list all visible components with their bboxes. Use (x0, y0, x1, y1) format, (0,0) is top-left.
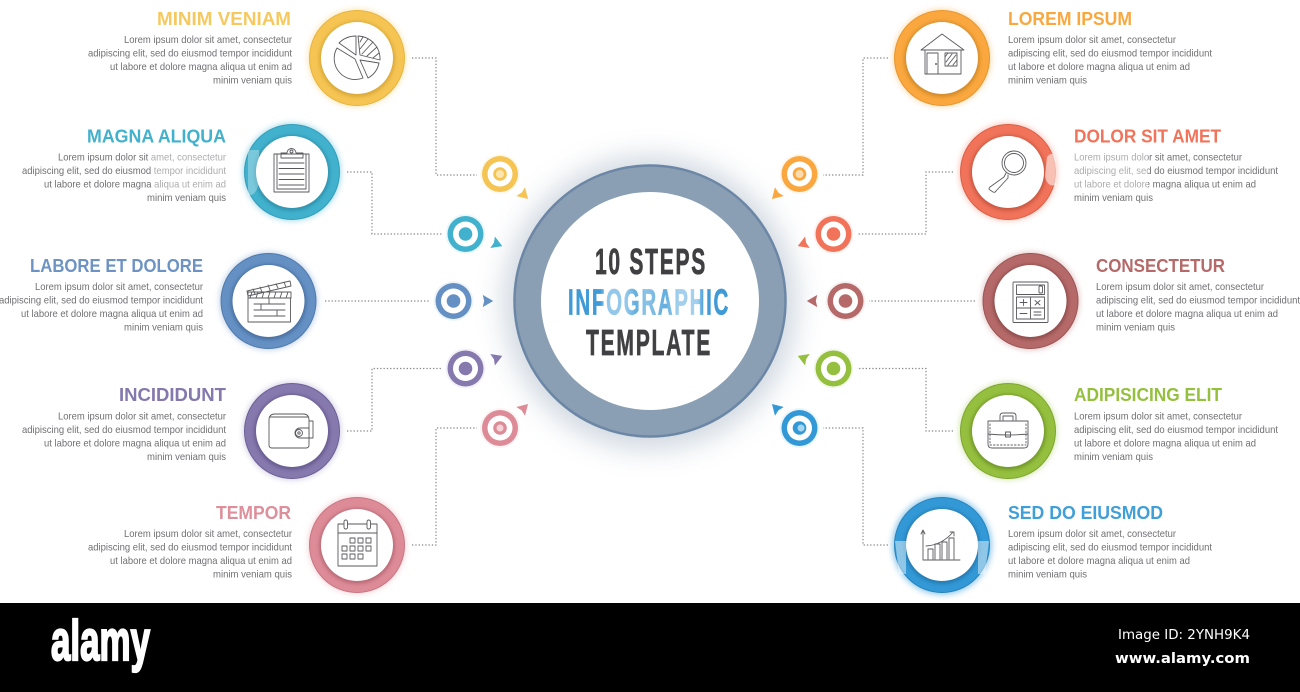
body text (1073, 151, 1278, 204)
icon: calculator (1013, 282, 1048, 322)
body text: Lorem ipsum dolor sit amet, consectetur (124, 529, 292, 540)
body text: minim veniam quis (213, 76, 292, 86)
node ring (959, 382, 1057, 480)
central disc (541, 192, 759, 410)
heading: SED DO EIUSMOD (1008, 503, 1163, 523)
panel: step minim veniam (88, 9, 532, 203)
arrow (490, 236, 505, 252)
body text: ut labore et dolore magna aliqua ut enim ad (110, 62, 292, 73)
body text: ut labore et dolore magna aliqua ut enim ad (1074, 180, 1256, 190)
body text: ut labore et dolore magna aliqua ut enim ad (110, 556, 292, 567)
small dot (814, 214, 854, 254)
arrow (807, 295, 817, 307)
node ring (959, 123, 1057, 221)
connector (823, 58, 888, 175)
node ring (893, 9, 991, 107)
body text: adipiscing elit, sed do eiusmod tempor incididunt (1074, 166, 1278, 177)
alamy logo: alamy (51, 609, 150, 673)
icon: pie chart (334, 36, 380, 80)
node ring (243, 123, 341, 221)
panel: step incididunt (22, 348, 505, 480)
body text: Lorem ipsum dolor sit amet, consectetur (124, 35, 292, 46)
small dot (480, 154, 520, 194)
body text: adipiscing elit, sed do eiusmod tempor incididunt (0, 296, 203, 306)
body text: minim veniam quis (1074, 193, 1153, 204)
heading: DOLOR SIT AMET (1074, 126, 1221, 146)
body text (0, 282, 203, 334)
connector (347, 172, 442, 234)
panel: step labore et dolore (0, 252, 493, 350)
body text (22, 412, 226, 463)
connector (857, 368, 953, 431)
title: 10 steps infographic template: 10 STEPS (595, 241, 707, 282)
panel: central circle (504, 157, 796, 449)
title: 10 steps infographic template: TEMPLATE (586, 322, 712, 363)
body text: adipiscing elit, sed do eiusmod tempor incididunt (1008, 48, 1212, 60)
body text: Lorem ipsum dolor sit amet, consectetur (58, 152, 226, 164)
body text: ut labore et dolore magna aliqua ut enim ad (1008, 62, 1190, 73)
body text: minim veniam quis (147, 452, 226, 463)
panel: step magna aliqua (22, 123, 505, 254)
body text: adipiscing elit, sed do eiusmod tempor incididunt (88, 542, 292, 554)
body text: minim veniam quis (213, 570, 292, 580)
body text (1096, 282, 1300, 334)
small dot (446, 214, 486, 254)
panel: step adipisicing elit (795, 348, 1278, 480)
body text: Lorem ipsum dolor sit amet, consectetur (1008, 529, 1176, 540)
node ring (892, 495, 992, 595)
icon: magnifier (989, 151, 1026, 192)
small dot (780, 154, 820, 194)
node ring (308, 496, 406, 594)
body text: Lorem ipsum dolor sit amet, consectetur (1074, 152, 1242, 164)
heading: CONSECTETUR (1096, 256, 1225, 276)
connector (412, 428, 477, 545)
image id: Image ID: 2YNH9K4 (1118, 628, 1250, 643)
node ring (308, 9, 406, 107)
body text (88, 35, 292, 86)
body text: ut labore et dolore magna aliqua ut enim ad (44, 438, 226, 450)
body text: adipiscing elit, sed do eiusmod tempor incididunt (1008, 542, 1212, 554)
connector (325, 300, 430, 302)
body text: minim veniam quis (147, 193, 226, 204)
heading: LABORE ET DOLORE (30, 256, 203, 276)
body text: minim veniam quis (1008, 76, 1087, 86)
arrow (768, 187, 784, 203)
connector (412, 58, 477, 175)
body text: Lorem ipsum dolor sit amet, consectetur (1008, 35, 1176, 46)
body text: ut labore et dolore magna aliqua ut enim ad (1008, 556, 1190, 567)
body text (22, 151, 227, 204)
body text: minim veniam quis (1096, 322, 1175, 334)
body text: Lorem ipsum dolor sit amet, consectetur (1074, 412, 1242, 422)
heading: INCIDIDUNT (119, 385, 226, 405)
arrow (490, 350, 505, 366)
arrow (516, 400, 532, 416)
heading: TEMPOR (216, 503, 291, 523)
arrow (516, 187, 532, 203)
body text: minim veniam quis (1074, 452, 1153, 463)
small dot (434, 281, 474, 321)
icon: calendar (338, 520, 377, 566)
heading: MAGNA ALIQUA (87, 126, 226, 146)
node ring (982, 252, 1080, 350)
connector (857, 172, 953, 234)
arrow (795, 350, 810, 366)
connector (823, 428, 888, 545)
body text: adipiscing elit, sed do eiusmod tempor incididunt (88, 48, 292, 60)
small dot (814, 348, 854, 388)
body text: ut labore et dolore magna aliqua ut enim ad (1096, 309, 1278, 320)
connector (347, 368, 442, 431)
heading: MINIM VENIAM (157, 9, 291, 29)
panel: step lorem ipsum (768, 9, 1212, 203)
central ring (514, 166, 786, 436)
small dot (446, 348, 486, 388)
body text (1008, 35, 1212, 86)
body text: adipiscing elit, sed do eiusmod tempor incididunt (22, 425, 226, 436)
heading: ADIPISICING ELIT (1074, 385, 1222, 405)
arrow (795, 236, 810, 252)
arrow (768, 400, 784, 416)
body text: Lorem ipsum dolor sit amet, consectetur (58, 412, 226, 422)
body text: ut labore et dolore magna aliqua ut enim ad (1074, 438, 1256, 450)
icon: clapperboard (247, 281, 291, 322)
small dot (780, 408, 820, 448)
panel: step consectetur (807, 252, 1300, 350)
body text: adipiscing elit, sed do eiusmod tempor incididunt (22, 166, 226, 177)
body text (1074, 412, 1278, 463)
panel: step tempor (88, 400, 532, 594)
panel: step dolor sit amet (795, 123, 1278, 254)
body text (88, 529, 292, 580)
icon: growth chart (921, 530, 960, 560)
website: www.alamy.com (1115, 651, 1250, 667)
panel: step sed do eiusmod (768, 400, 1212, 595)
icon: briefcase (988, 413, 1028, 448)
icon: house (921, 34, 964, 74)
node ring (220, 252, 318, 350)
body text: adipiscing elit, sed do eiusmod tempor incididunt (1074, 425, 1278, 436)
icon: wallet (269, 414, 313, 448)
node ring (243, 382, 341, 480)
title: 10 steps infographic template (568, 241, 730, 363)
body text (1008, 529, 1212, 580)
body text: minim veniam quis (124, 322, 203, 334)
icon: clipboard (274, 148, 309, 192)
arrow (483, 295, 493, 307)
title: 10 steps infographic template: INFOGRAPHIC (568, 282, 730, 322)
body text: Lorem ipsum dolor sit amet, consectetur (1096, 282, 1264, 293)
small dot (480, 408, 520, 448)
body text: minim veniam quis (1008, 570, 1087, 580)
connector (869, 300, 975, 302)
body text: Lorem ipsum dolor sit amet, consectetur (35, 282, 203, 293)
heading: LOREM IPSUM (1008, 9, 1132, 29)
body text: ut labore et dolore magna aliqua ut enim ad (44, 180, 226, 190)
small dot (826, 281, 866, 321)
footer band (0, 603, 1300, 692)
body text: ut labore et dolore magna aliqua ut enim ad (21, 309, 203, 320)
